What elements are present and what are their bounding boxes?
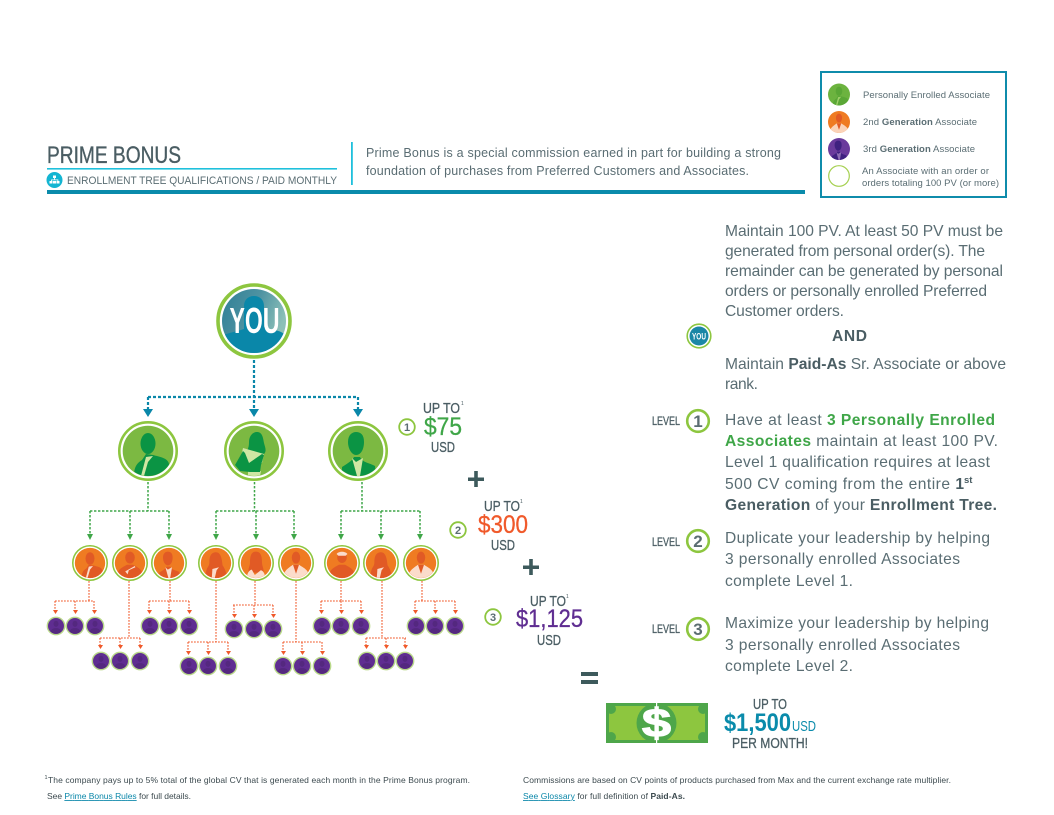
level 1: Level 1 qualification requires at least <box>725 454 991 471</box>
level 3: 3 <box>693 620 703 639</box>
you requirement: Maintain Paid-As Sr. Associate or above <box>725 356 1006 373</box>
legend: 100 PV ring: An Associate with an order or <box>862 166 989 177</box>
footnote right <box>523 775 951 801</box>
title: PRIME BONUS <box>47 142 181 169</box>
total payout: USD <box>792 718 816 735</box>
payout level 2: $300 <box>478 511 528 539</box>
you requirement: orders or personally enrolled Preferred <box>725 283 987 300</box>
payout level 3: $1,125 <box>516 605 583 633</box>
total payout: PER MONTH! <box>732 735 808 752</box>
description: Prime Bonus is a special commission earned in part for building a strong <box>366 146 781 160</box>
level 1: LEVEL <box>652 414 680 428</box>
payout level 2: USD <box>491 537 515 554</box>
payout level 1: 1 <box>404 422 410 434</box>
equals sign <box>581 672 598 684</box>
you requirement: remainder can be generated by personal <box>725 263 1003 280</box>
icon: dollar bill <box>606 702 708 746</box>
legend: 3rd generation <box>828 138 975 160</box>
legend: personally enrolled: Personally Enrolled Associate <box>863 90 990 101</box>
you requirement: Maintain 100 PV. At least 50 PV must be <box>725 223 1003 240</box>
orange connectors <box>53 581 458 655</box>
green connectors <box>87 482 423 540</box>
payout level 1: UP TO <box>423 400 460 417</box>
payout level 2: UP TO <box>484 498 520 515</box>
you requirement: generated from personal order(s). The <box>725 243 985 260</box>
payout level 3: USD <box>537 632 561 649</box>
payout level 1: USD <box>431 439 455 456</box>
footnote left: The company pays up to 5% total of the global CV that is generated each month in the Prime Bonus program. <box>48 775 470 785</box>
level 1: 1 <box>693 412 703 431</box>
orange associates <box>73 546 438 580</box>
you requirement <box>687 223 1006 393</box>
icon: small you badge: YOU <box>692 332 706 342</box>
legend: 100 PV ring: orders totaling 100 PV (or more) <box>862 178 999 189</box>
plus sign <box>468 471 484 487</box>
icon: small you badge <box>687 324 711 348</box>
legend: 2nd generation: 2nd Generation Associate <box>863 117 977 128</box>
legend: 100 PV ring <box>829 166 999 189</box>
footnote left: See Prime Bonus Rules for full details. <box>47 791 191 801</box>
level 3: 3 personally enrolled Associates <box>725 637 960 654</box>
you badge: YOU <box>230 300 280 341</box>
subtitle: ENROLLMENT TREE QUALIFICATIONS / PAID MONTHLY <box>67 175 338 187</box>
level 1: st <box>964 475 973 486</box>
level 1: Have at least 3 Personally Enrolled <box>725 412 995 429</box>
level 1: Generation of your Enrollment Tree. <box>725 497 997 514</box>
you requirement: rank. <box>725 376 758 393</box>
legend: 3rd generation: 3rd Generation Associate <box>863 144 975 155</box>
level 3: LEVEL <box>652 622 680 636</box>
level 2: 2 <box>693 532 703 551</box>
level 2: complete Level 1. <box>725 573 853 590</box>
level 2: 3 personally enrolled Associates <box>725 551 960 568</box>
footnote left: 1 <box>44 775 48 781</box>
payout level 2 <box>450 498 528 554</box>
level 3 <box>652 615 989 675</box>
description <box>366 146 781 178</box>
you badge <box>218 285 290 357</box>
level 1 <box>652 410 998 514</box>
plus sign <box>523 559 539 575</box>
legend: 2nd generation <box>828 111 977 133</box>
payout level 3: UP TO <box>530 593 566 610</box>
level 1: 500 CV coming from the entire 1 <box>725 476 964 493</box>
title block <box>46 142 338 188</box>
payout level 2: 1 <box>520 499 523 505</box>
payout level 2: 2 <box>455 525 461 537</box>
level 3: Maximize your leadership by helping <box>725 615 989 632</box>
payout level 1: 1 <box>461 401 464 407</box>
green associate 3 <box>329 422 387 480</box>
footnote left <box>44 775 470 801</box>
total payout <box>724 696 816 752</box>
payout level 1 <box>399 400 464 456</box>
you requirement: Customer orders. <box>725 303 844 320</box>
level 2: Duplicate your leadership by helping <box>725 530 990 547</box>
level 2 <box>652 530 990 590</box>
total payout: UP TO <box>753 696 787 713</box>
legend: personally enrolled <box>828 84 990 106</box>
payout level 1: $75 <box>424 413 462 441</box>
level 1: Associates maintain at least 100 PV. <box>725 433 998 450</box>
icon: dollar bill: $ <box>642 702 671 746</box>
payout level 3: 3 <box>490 612 496 624</box>
icon: enrollment tree <box>46 172 62 188</box>
blue connectors <box>143 360 363 417</box>
green associate 2 <box>225 422 283 480</box>
footnote right: Commissions are based on CV points of products purchased from Max and the current exchange rate multiplier. <box>523 775 951 785</box>
green associate 1 <box>119 422 177 480</box>
level 2: LEVEL <box>652 535 680 549</box>
description: foundation of purchases from Preferred Customers and Associates. <box>366 164 749 178</box>
payout level 3 <box>485 593 583 649</box>
footnote right: See Glossary for full definition of Paid-As. <box>523 791 685 801</box>
payout level 3: 1 <box>566 594 569 600</box>
you requirement: AND <box>832 328 867 345</box>
total payout: $1,500 <box>724 709 791 737</box>
level 3: complete Level 2. <box>725 658 853 675</box>
legend panel <box>821 72 1006 197</box>
purple associates <box>47 617 464 675</box>
